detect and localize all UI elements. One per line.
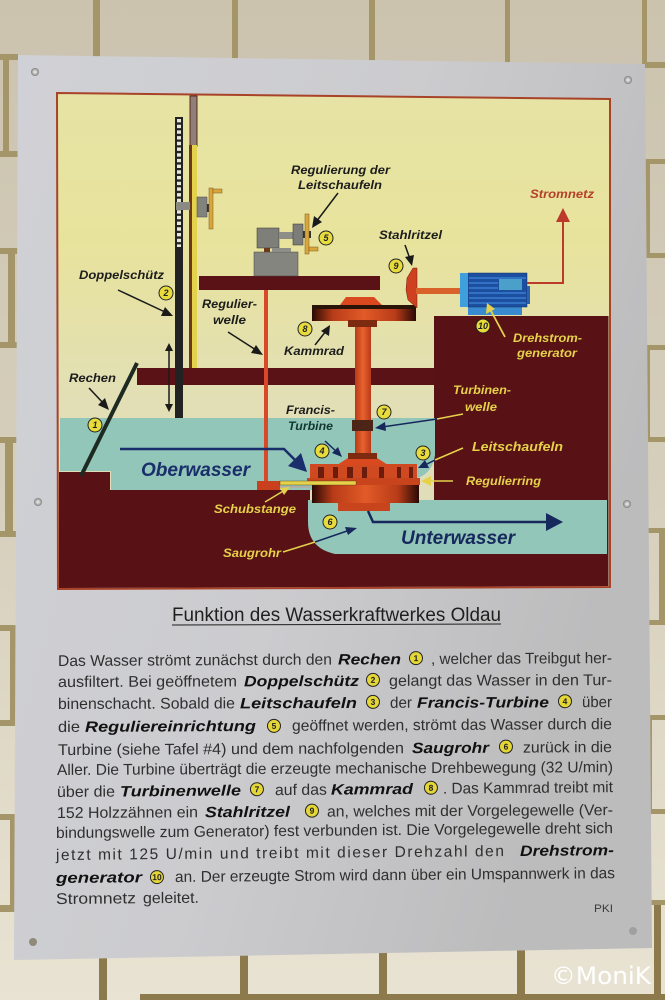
- arrow: gate travel double arrow: [165, 343, 173, 412]
- number marker 8: 8: [302, 324, 308, 334]
- number marker 6: 6: [327, 517, 333, 527]
- Francis turbine assembly: [307, 453, 420, 511]
- title: Funktion des Wasserkraftwerkes Oldau: [172, 605, 501, 626]
- line 10: jetzt mit 125 U/min und treibt mit dieser Drehzahl den: [55, 843, 504, 864]
- label: Francis-Turbine: Turbine: [288, 419, 333, 433]
- line 10: Drehstrom-: [520, 842, 614, 860]
- line 9: bindungswelle zum Generator) fest verbunden ist. Die Vorgelegewelle dreht sich: [56, 820, 613, 842]
- label: Saugrohr: Saugrohr: [223, 546, 282, 560]
- label: Unterwasser: Unterwasser: [401, 528, 517, 549]
- number marker 5: 5: [323, 233, 329, 243]
- label: Regulierung der Leitschaufeln: [291, 163, 391, 192]
- label: Stahlritzel: Stahlritzel: [379, 228, 443, 242]
- arrow: Rechen: [89, 388, 109, 410]
- arrow: Regulierung der Leitschaufeln: [312, 193, 338, 228]
- screw top left: [31, 68, 39, 76]
- line 8: 9: [310, 806, 315, 816]
- line 2: 2: [371, 675, 376, 685]
- line 5: Turbine (siehe Tafel #4) und dem nachfolgenden: [58, 740, 404, 759]
- arrow: Drehstromgenerator: [486, 303, 505, 337]
- label: Turbinenwelle: [453, 383, 511, 414]
- line 2: gelangt das Wasser in den Tur-: [389, 672, 612, 690]
- line 4: Reguliereinrichtung: [85, 718, 256, 736]
- rake screen: [81, 363, 137, 476]
- number marker 9: [389, 259, 403, 273]
- body text: [55, 650, 615, 908]
- label: Drehstromgenerator: generator: [516, 346, 578, 360]
- upper water: [60, 418, 435, 490]
- number marker 8: [298, 322, 312, 336]
- line 12: Stromnetz: [56, 890, 136, 908]
- label: Schubstange: Schubstange: [214, 502, 296, 516]
- screw bottom left: [29, 938, 37, 946]
- line 1: [58, 650, 612, 670]
- number marker 1: 1: [92, 420, 98, 430]
- line 3: Leitschaufeln: [240, 695, 357, 712]
- push rod: [257, 481, 356, 490]
- number marker 7: 7: [381, 407, 387, 417]
- label: Regulierung der Leitschaufeln: Regulierung der: [291, 163, 391, 177]
- number marker 3: [416, 446, 430, 460]
- line 1: 1: [414, 653, 419, 663]
- number marker 4: 4: [318, 446, 325, 456]
- line 1: Das Wasser strömt zunächst durch den: [58, 652, 332, 670]
- line 7: über die: [57, 783, 115, 801]
- number marker 4: [315, 444, 329, 458]
- number marker 5: [319, 231, 333, 245]
- screw bottom right: [629, 927, 637, 935]
- line 3: 3: [371, 697, 376, 707]
- line 12: geleitet.: [143, 890, 199, 907]
- comb wheel: [312, 297, 416, 327]
- line 2: [58, 672, 612, 691]
- line 3: Francis-Turbine: [417, 694, 549, 712]
- number marker 6: [323, 515, 337, 529]
- label: Rechen: Rechen: [69, 371, 116, 385]
- countershaft: [416, 288, 460, 294]
- line 5: zurück in die: [523, 739, 612, 757]
- number marker 3: 3: [420, 448, 426, 458]
- line 5: [58, 739, 612, 759]
- label: Leitschaufeln: Leitschaufeln: [472, 439, 563, 454]
- line 7: 7: [255, 784, 260, 794]
- arrow: power line to grid: [527, 208, 570, 283]
- shaft coupling: [352, 420, 373, 431]
- arrow: Turbinenwelle: [375, 414, 463, 431]
- arrow: Leitschaufeln: [418, 448, 463, 468]
- upper concrete beam: [199, 276, 380, 290]
- line 8: [57, 802, 613, 822]
- label: Regulierwelle: welle: [213, 313, 246, 327]
- arrow: Schubstange: [265, 487, 290, 502]
- label: Regulierring: Regulierring: [466, 474, 542, 488]
- steel pinion: [406, 268, 417, 308]
- number marker 1: [88, 418, 102, 432]
- line 5: Saugrohr: [412, 740, 490, 757]
- screw middle left: [34, 498, 42, 506]
- line 4: 5: [272, 721, 277, 731]
- ground and machine block: [59, 316, 608, 588]
- line 11: an. Der erzeugte Strom wird dann über ein Umspannwerk in das: [175, 865, 615, 886]
- line 3: über: [582, 694, 612, 711]
- label: Drehstromgenerator: Drehstrom-: [513, 331, 582, 345]
- gate guide wall: [189, 96, 197, 368]
- double gate toothed rack: [175, 117, 183, 418]
- number marker 10: 10: [478, 321, 488, 331]
- arrow: upper water flow: [120, 449, 307, 472]
- line 1: , welcher das Treibgut her-: [431, 650, 612, 668]
- regulating shaft: [264, 290, 268, 490]
- arrow: outflow: [368, 511, 563, 531]
- number marker 10: [476, 319, 490, 333]
- screw middle right: [623, 500, 631, 508]
- screw top right: [624, 76, 632, 84]
- label: Drehstromgenerator: [513, 331, 582, 360]
- label: Stromnetz: Stromnetz: [530, 187, 594, 201]
- line 11: 10: [152, 872, 162, 882]
- line 8: an, welches mit der Vorgelegewelle (Ver-: [327, 802, 613, 821]
- number marker 9: 9: [393, 261, 399, 271]
- line 4: [58, 716, 612, 736]
- author initials: PKI: [594, 903, 613, 915]
- arrow: Stahlritzel: [405, 245, 414, 266]
- label: Kammrad: Kammrad: [284, 344, 345, 358]
- label: Regulierung der Leitschaufeln: Leitschaufeln: [298, 178, 382, 192]
- label: Turbinenwelle: Turbinen-: [453, 383, 511, 397]
- arrow: Francis-Turbine: [325, 441, 342, 457]
- line 3: der: [390, 695, 412, 712]
- lower concrete beam: [137, 368, 435, 385]
- label: Regulierwelle: [202, 297, 257, 327]
- gate drive mechanism: [176, 188, 222, 229]
- arrow: Regulierwelle: [228, 332, 263, 355]
- arrow: Saugrohr: [283, 527, 357, 552]
- arrow: Kammrad: [315, 325, 330, 345]
- line 7: [57, 779, 614, 801]
- line 2: Doppelschütz: [244, 673, 360, 690]
- line 7: auf das: [275, 782, 327, 799]
- label: Francis-Turbine: Francis-: [286, 403, 335, 417]
- label: Regulierwelle: Regulier-: [202, 297, 257, 311]
- turbine shaft: [355, 318, 371, 458]
- line 7: . Das Kammrad treibt mit: [443, 779, 614, 798]
- line 8: 152 Holzzähnen ein: [57, 804, 198, 822]
- arrow: Regulierring: [421, 476, 453, 486]
- lower water and draft tube: [308, 500, 607, 554]
- line 6: Aller. Die Turbine überträgt die erzeugte mechanische Drehbewegung (32 U/min): [57, 759, 613, 779]
- label: Turbinenwelle: welle: [465, 400, 497, 414]
- photographer watermark: ©MoniK: [551, 962, 652, 990]
- line 7: Kammrad: [331, 781, 414, 799]
- line 1: Rechen: [338, 651, 401, 669]
- line 3: binenschacht. Sobald die: [58, 695, 235, 713]
- line 7: Turbinenwelle: [120, 782, 241, 800]
- line 3: 4: [563, 696, 568, 706]
- arrow: Doppelschütz: [118, 290, 173, 316]
- line 5: 6: [504, 742, 509, 752]
- number marker 2: 2: [162, 288, 169, 298]
- line 11: generator: [55, 869, 143, 887]
- line 4: geöffnet werden, strömt das Wasser durch die: [292, 716, 612, 735]
- diagram: hydro power plant cross section: [57, 93, 610, 589]
- line 3: [58, 694, 612, 713]
- label: Doppelschütz: Doppelschütz: [79, 268, 164, 282]
- three-phase generator: [460, 273, 530, 315]
- diagram frame and background: [57, 93, 610, 589]
- line 2: ausfiltert. Bei geöffnetem: [58, 673, 237, 691]
- label: Francis-Turbine: [286, 403, 335, 433]
- regulating gear unit: [254, 214, 318, 276]
- line 7: 8: [429, 783, 434, 793]
- label: Oberwasser: Oberwasser: [141, 460, 252, 481]
- number marker 7: [377, 405, 391, 419]
- number marker 2: [159, 286, 173, 300]
- line 8: Stahlritzel: [205, 804, 291, 821]
- line 12: [56, 890, 199, 908]
- line 4: die: [58, 719, 80, 736]
